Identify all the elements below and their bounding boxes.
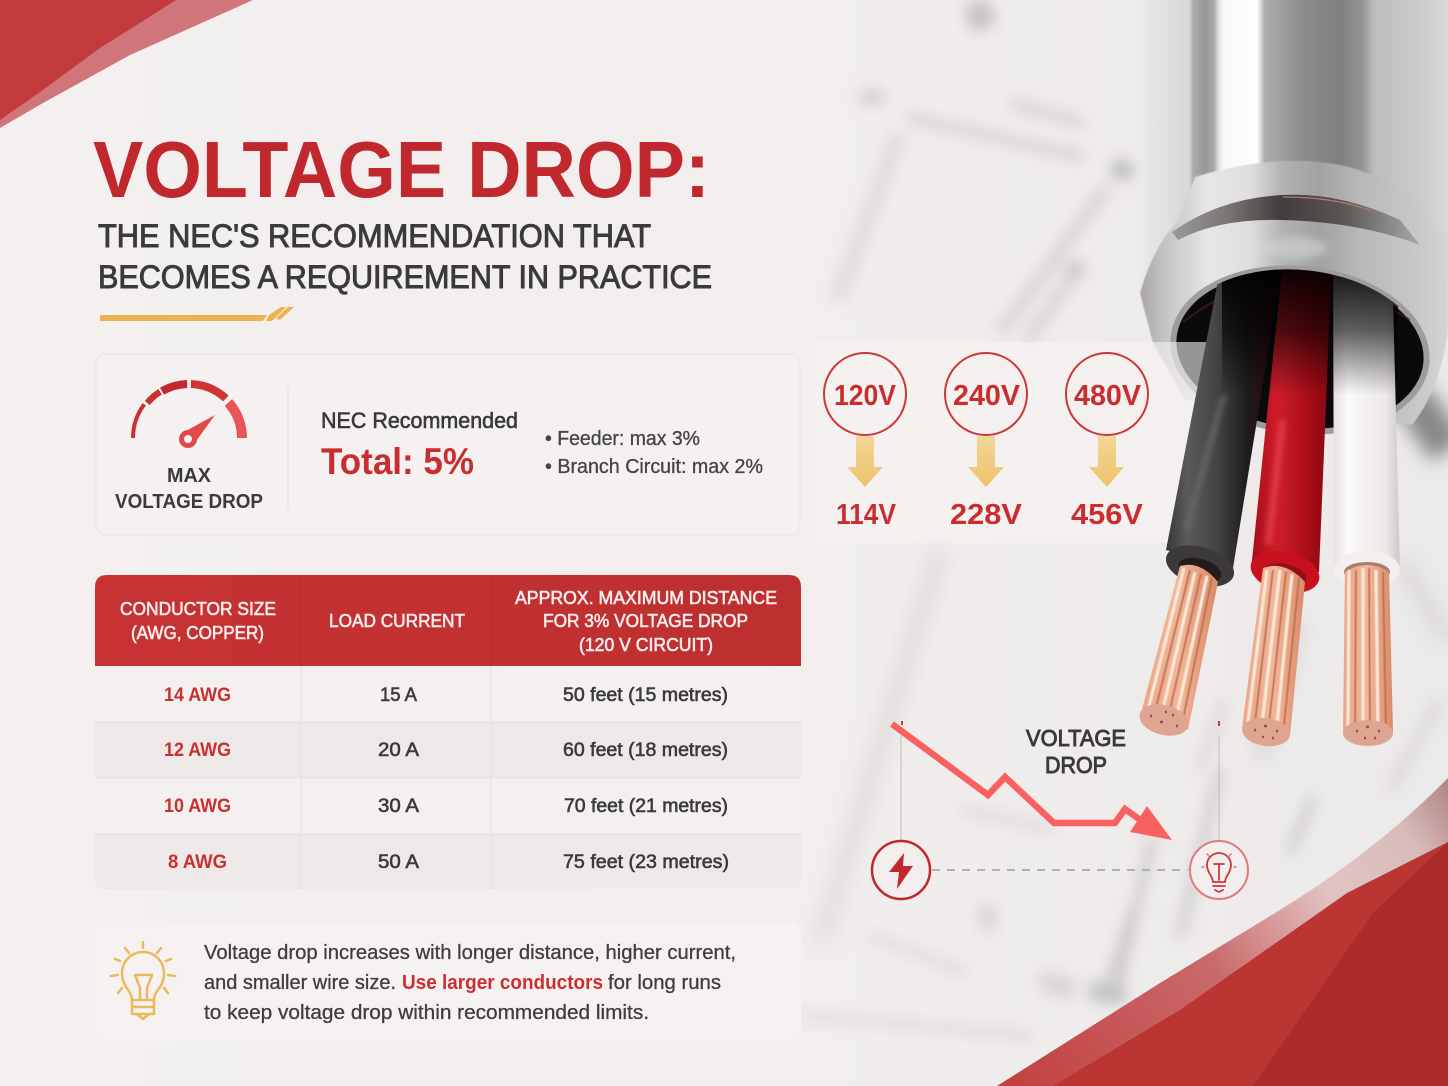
table header: APPROX. MAXIMUM DISTANCE (515, 588, 777, 608)
table header: FOR 3% VOLTAGE DROP (543, 611, 748, 631)
table rows: 12 AWG (164, 739, 231, 761)
voltage comparison: 480V to 456V (1066, 353, 1148, 531)
icon: gauge (133, 384, 242, 446)
wire: red (1240, 260, 1332, 749)
subtitle: THE NEC'S RECOMMENDATION THAT (98, 218, 651, 254)
voltage comparison: 240V to 228V (945, 353, 1027, 531)
table rows: 60 feet (18 metres) (563, 739, 728, 761)
callout: advice (95, 922, 801, 1041)
table rows: 20 A (378, 739, 419, 761)
photo: three copper-stranded wires (1136, 260, 1400, 749)
wire: black (1136, 260, 1283, 741)
gauge label: VOLTAGE DROP (115, 490, 263, 513)
diagram label: VOLTAGE (1026, 725, 1126, 751)
bottom-right red corner shape (997, 778, 1448, 1086)
table rows: 8 AWG (168, 851, 227, 873)
feeder and branch limits: • Branch Circuit: max 2% (545, 456, 763, 478)
table header: LOAD CURRENT (329, 611, 465, 631)
subtitle (98, 218, 712, 295)
table rows: 50 A (378, 851, 419, 873)
subtitle: BECOMES A REQUIREMENT IN PRACTICE (98, 259, 712, 295)
callout text: and smaller wire size. (204, 972, 396, 994)
callout text: Voltage drop increases with longer distance, higher current, (204, 942, 736, 964)
icon: load bulb (1190, 841, 1248, 899)
feeder and branch limits (545, 428, 763, 478)
table header: CONDUCTOR SIZE (120, 599, 276, 619)
gauge label (115, 464, 263, 513)
voltage comparison: 240V to 228V: 228V (950, 499, 1023, 531)
table header: (AWG, COPPER) (131, 623, 264, 643)
photo: metal conduit (1140, 0, 1448, 444)
gauge label: MAX (167, 464, 211, 487)
title: VOLTAGE DROP: (93, 125, 710, 214)
icon: power source bolt (872, 841, 930, 899)
voltage comparison: 240V to 228V: 240V (953, 380, 1021, 412)
voltage comparison: 480V to 456V: 480V (1074, 380, 1142, 412)
callout text (204, 942, 736, 1024)
callout text: to keep voltage drop within recommended limits. (204, 1002, 649, 1024)
top-left red corner shape (0, 0, 253, 128)
table rows: 75 feet (23 metres) (563, 851, 729, 873)
diagram: voltage drop along circuit (872, 721, 1248, 899)
voltage comparison: 120V to 114V: 120V (834, 380, 897, 412)
voltage comparison: 480V to 456V: 456V (1071, 499, 1144, 531)
callout text: for long runs (608, 972, 721, 994)
icon: light bulb (111, 942, 175, 1019)
table header (95, 575, 801, 666)
feeder and branch limits: • Feeder: max 3% (545, 428, 700, 450)
gold underline accent (100, 307, 294, 321)
NEC recommended label: NEC Recommended (321, 408, 518, 433)
table: conductor sizes (95, 575, 801, 889)
callout text: Use larger conductors (402, 972, 603, 994)
table rows: 10 AWG (164, 795, 231, 817)
table rows: 14 AWG (164, 684, 231, 706)
voltage comparison: 120V to 114V: 114V (836, 499, 897, 531)
table rows: 30 A (378, 795, 419, 817)
total 5%: Total: 5% (321, 441, 474, 482)
panel: max voltage drop (96, 354, 800, 535)
arrow: falling voltage (892, 724, 1172, 840)
wire: white (1333, 260, 1400, 746)
table rows: 70 feet (21 metres) (564, 795, 728, 817)
diagram label: DROP (1045, 752, 1107, 778)
table rows: 15 A (380, 684, 417, 706)
table rows: 50 feet (15 metres) (563, 684, 728, 706)
table rows (95, 666, 801, 889)
diagram label (1026, 725, 1126, 778)
table header: (120 V CIRCUIT) (579, 635, 713, 655)
voltage panel backdrop (815, 342, 1210, 543)
voltage comparison: 120V to 114V (824, 353, 906, 531)
